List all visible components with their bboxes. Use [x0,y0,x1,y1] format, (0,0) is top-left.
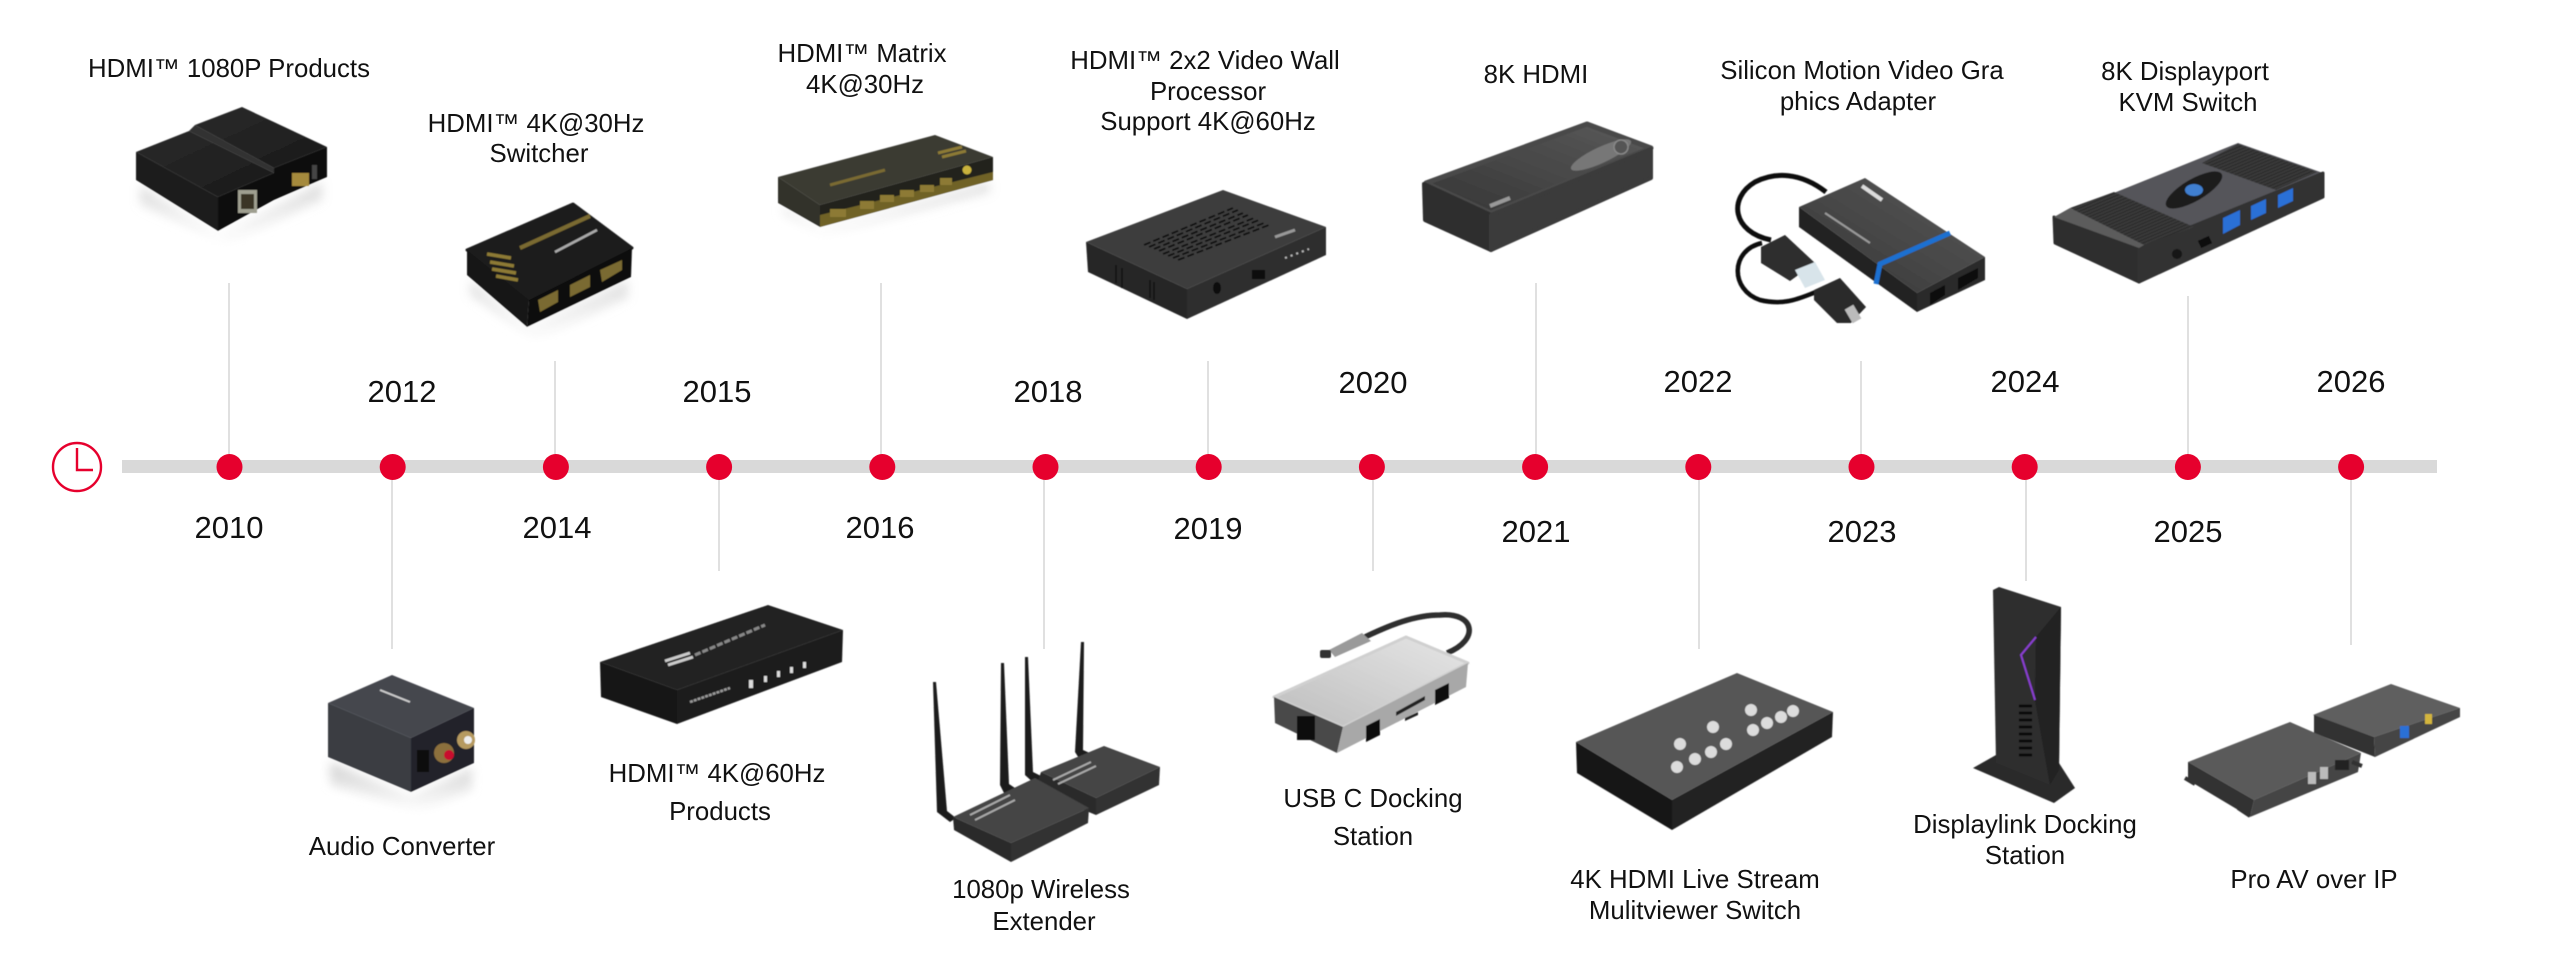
year labels: 2025 [2154,514,2222,549]
year labels: 2020 [1339,365,1407,400]
year labels: 2018 [1014,374,1082,409]
icon: clock [53,443,101,491]
connector lines [229,283,2351,649]
label: HDMI 2x2 Video Wall Processor: Support 4K@60Hz [1100,108,1316,136]
label: 4K HDMI Live Stream Multiviewer Switch: 4K HDMI Live Stream [1570,866,1820,894]
label: HDMI 2x2 Video Wall Processor: Processor [1150,78,1266,106]
product: 8K Displayport KVM switch [2054,143,2323,282]
product: 8K HDMI switch [1424,124,1651,250]
year labels: 2026 [2317,364,2385,399]
label: HDMI 1080P Products: HDMI™ 1080P Products [88,55,370,83]
product: Pro AV over IP units [2185,684,2460,817]
product: HDMI 4K@30Hz switcher [467,204,632,342]
product: USB C docking station [1274,615,1469,753]
label: USB C Docking Station: USB C Docking [1283,785,1463,813]
label: Displaylink Docking Station: Displaylink Docking [1913,811,2137,839]
label: HDMI 4K@60Hz Products: Products [669,798,771,826]
year labels: 2014 [523,510,591,545]
label: 1080p Wireless Extender: 1080p Wireless [952,876,1130,904]
label: 1080p Wireless Extender: Extender [992,908,1096,936]
axis bar [122,460,2437,473]
label: HDMI 4K@30Hz Switcher: HDMI™ 4K@30Hz [428,110,644,138]
timeline dots [216,454,2364,480]
product: 1080p wireless extender [933,642,1160,862]
label: HDMI 2x2 Video Wall Processor: HDMI™ 2x2 Video Wall [1070,47,1340,75]
label: 4K HDMI Live Stream Multiviewer Switch: Mulitviewer Switch [1589,897,1801,925]
label: HDMI Matrix: HDMI™ Matrix [777,40,947,68]
product: HDMI 4K@60Hz splitter [600,605,843,724]
label: Displaylink Docking Station: Station [1985,842,2065,870]
product: HDMI 2x2 video wall processor [1086,190,1326,319]
year labels: 2010 [195,510,263,545]
label: Audio Converter: Audio Converter [309,833,496,861]
product: Silicon Motion graphics adapter [1738,175,1985,323]
product: HDMI Matrix 4K@30Hz [778,135,993,238]
label: 8K Displayport KVM Switch: KVM Switch [2118,89,2258,117]
product: HDMI 1080P extender pair [136,107,327,245]
label: Pro AV over IP: Pro AV over IP [2230,866,2398,894]
label: Silicon Motion Video Graphics Adapter: phics Adapter [1780,88,1937,116]
product: audio converter [328,675,475,812]
label: Silicon Motion Video Graphics Adapter: Silicon Motion Video Gra [1720,57,2004,85]
year labels: 2021 [1502,514,1570,549]
year labels: 2024 [1991,364,2059,399]
label: HDMI 4K@30Hz Switcher: Switcher [490,140,589,168]
year labels: 2015 [683,374,751,409]
label: 8K Displayport KVM Switch: 8K Displayport [2101,58,2269,86]
year labels: 2023 [1828,514,1896,549]
label: HDMI Matrix: 4K@30Hz [806,71,924,99]
product: 4K HDMI live stream multiviewer switch [1576,673,1833,830]
product: Displaylink docking station [1973,587,2075,803]
label: USB C Docking Station: Station [1333,823,1413,851]
year labels: 2016 [846,510,914,545]
year labels [195,364,2385,549]
label: HDMI 4K@60Hz Products: HDMI™ 4K@60Hz [609,760,825,788]
year labels: 2019 [1174,511,1242,546]
year labels: 2012 [368,374,436,409]
label: 8K HDMI: 8K HDMI [1484,61,1588,89]
year labels: 2022 [1664,364,1732,399]
